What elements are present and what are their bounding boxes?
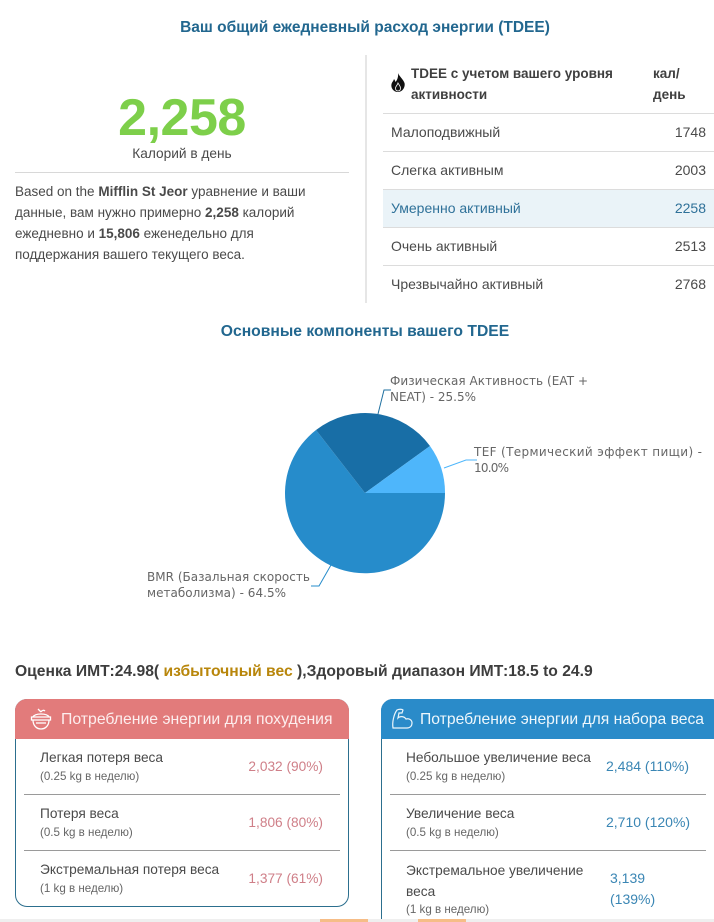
label: BMR: метаболизма) - 64.5%: [147, 586, 286, 600]
icon: flexed arm: [392, 708, 413, 729]
label: BMR: BMR (Базальная скорость: [147, 570, 310, 584]
panel header: weight gain: [381, 699, 714, 739]
panel header: weight loss: [15, 699, 349, 739]
calorie unit label: Калорий в день: [132, 146, 232, 161]
label: TEF: 10.0%: [474, 461, 509, 475]
row: extreme loss: [40, 862, 323, 895]
row: loss: 1,806 (80%): [248, 815, 323, 830]
row: moderately active: Умеренно активный: [391, 200, 521, 216]
label: physical activity: [378, 374, 588, 414]
panel: activity table: [383, 66, 714, 266]
title: Ваш общий ежедневный расход энергии (TDEE): [180, 19, 550, 36]
row: extreme gain: 3,139: [610, 870, 645, 886]
row: light loss: 2,032 (90%): [248, 759, 323, 774]
row: gain: 2,710 (120%): [606, 814, 690, 830]
explanation text: поддержания вашего текущего веса.: [15, 247, 245, 262]
text: 2768: [675, 276, 706, 292]
label: BMR: [147, 565, 331, 600]
table header: активности: [411, 87, 487, 102]
explanation text: данные, вам нужно примерно 2,258 калорий: [15, 205, 294, 220]
row: loss: Потеря веса: [40, 806, 119, 821]
icon: apple bowl: [30, 708, 52, 730]
explanation text: Based on the Mifflin St Jeor уравнение и ваши: [15, 184, 306, 199]
label: TEF: TEF (Термический эффект пищи) -: [473, 445, 702, 459]
text: 2258: [675, 200, 706, 216]
label: physical activity: NEAT) - 25.5%: [390, 390, 476, 404]
slice: physical activity: [316, 413, 430, 493]
slice: TEF: [365, 446, 445, 493]
row: gain: Увеличение веса: [406, 806, 514, 821]
row: light loss: [40, 750, 323, 783]
table header: unit: кал/: [653, 66, 680, 81]
table header: unit: [653, 66, 686, 102]
text: 2513: [675, 238, 706, 254]
text: 1748: [675, 124, 706, 140]
row: extreme loss: (1 kg в неделю): [40, 882, 123, 895]
label: physical activity: Физическая Активность (EAT +: [390, 374, 588, 388]
row: small gain: (0.25 kg в неделю): [406, 770, 505, 783]
row: extreme gain: веса: [406, 884, 435, 899]
table header: unit: день: [653, 87, 686, 102]
row: extreme gain: (1 kg в неделю): [406, 903, 489, 916]
label: TEF: [444, 445, 702, 475]
panel title: weight loss: Потребление энергии для похудения: [61, 711, 333, 728]
row: very active: Очень активный: [391, 238, 497, 254]
row: extreme gain: [406, 863, 655, 916]
explanation text: [15, 184, 306, 262]
panel title: weight gain: Потребление энергии для набора веса: [420, 711, 704, 728]
table header: [411, 66, 613, 102]
row: loss: [40, 806, 323, 839]
row: extremely active: Чрезвычайно активный: [391, 276, 543, 292]
row: gain: (0.5 kg в неделю): [406, 826, 499, 839]
row: small gain: [406, 750, 689, 783]
text: 2003: [675, 162, 706, 178]
highlighted row background: [383, 189, 714, 227]
row: sedentary: Малоподвижный: [391, 124, 500, 140]
BMI summary: Оценка ИМТ:24.98( избыточный вес ),Здоровый диапазон ИМТ:18.5 to 24.9: [15, 663, 593, 680]
big calorie number: 2,258: [118, 89, 246, 147]
row: gain: [406, 806, 690, 839]
chart heading: Основные компоненты вашего TDEE: [221, 323, 509, 340]
row: small gain: 2,484 (110%): [606, 758, 689, 774]
row: light loss: Легкая потеря веса: [40, 750, 163, 765]
row: extreme gain: (139%): [610, 891, 655, 907]
panel: total calories: [15, 89, 349, 262]
bottom strip: [0, 919, 714, 922]
slice: BMR: [285, 430, 445, 573]
pie chart: [147, 374, 702, 600]
row: extreme gain: Экстремальное увеличение: [406, 863, 583, 878]
row: loss: (0.5 kg в неделю): [40, 826, 133, 839]
explanation text: ежедневно и 15,806 еженедельно для: [15, 226, 254, 241]
row: extreme loss: Экстремальная потеря веса: [40, 862, 219, 877]
row: extreme loss: 1,377 (61%): [248, 871, 323, 886]
row: small gain: Небольшое увеличение веса: [406, 750, 591, 765]
table header: TDEE с учетом вашего уровня: [411, 66, 613, 81]
row: light loss: (0.25 kg в неделю): [40, 770, 139, 783]
panel: weight loss: [15, 699, 349, 907]
panel: weight gain: [381, 699, 714, 922]
icon: flame: [391, 73, 405, 92]
row: lightly active: Слегка активным: [391, 162, 503, 178]
